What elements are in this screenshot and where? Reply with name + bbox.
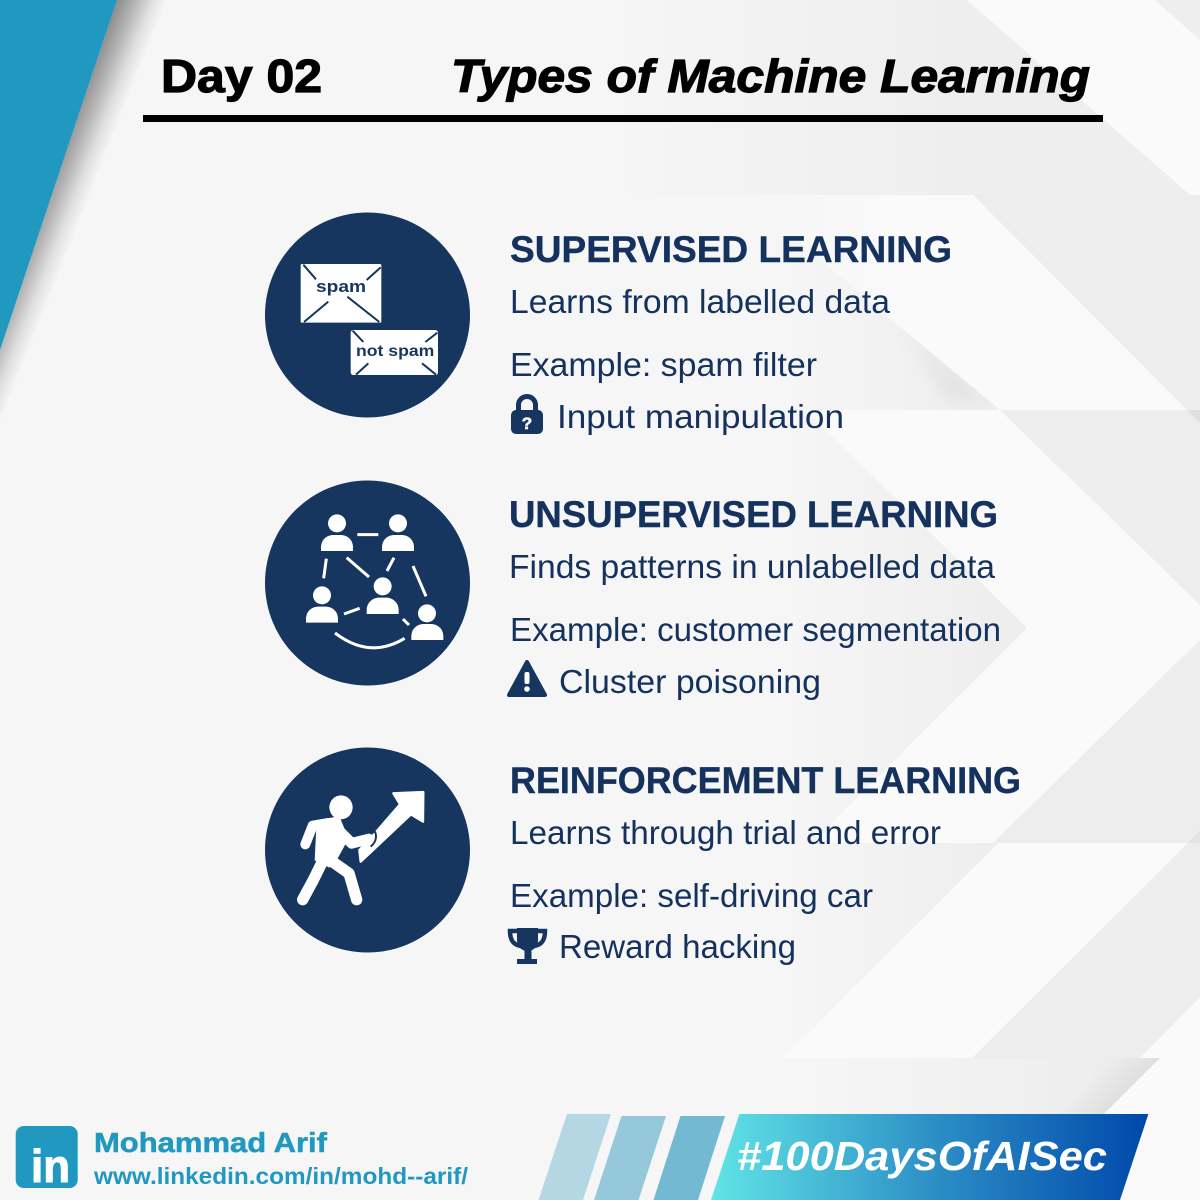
example: Example: self-driving car: [510, 877, 873, 914]
heading: reinforcement learning: REINFORCEMENT LEARNING: [510, 760, 1021, 801]
icon: connected people in circle: [265, 480, 470, 686]
example: Example: customer segmentation: [510, 611, 1001, 648]
panel: unsupervised learning: [265, 480, 1001, 700]
footer: LinkedIn logo: [16, 1126, 78, 1192]
icon: lock: [511, 396, 543, 434]
risk: cluster poisoning: Cluster poisoning: [559, 663, 821, 700]
icon: lock: ?: [522, 414, 532, 433]
icon: trophy: [510, 928, 545, 964]
heading: unsupervised learning: UNSUPERVISED LEARNING: [509, 494, 998, 535]
description: Learns through trial and error: [510, 814, 941, 851]
footer: hashtag banner: [711, 1114, 1148, 1200]
footer: decorative slanted bars: [538, 1114, 725, 1200]
footer: profile URL: www.linkedin.com/in/mohd--arif/: [93, 1163, 469, 1189]
icon: spam and not spam envelopes in circle: not spam: [356, 343, 434, 360]
icon: spam and not spam envelopes in circle: spam: [316, 277, 366, 296]
panel: reinforcement learning: [265, 748, 1021, 965]
description: Learns from labelled data: [510, 283, 891, 320]
example: Example: spam filter: [510, 346, 817, 383]
title underline: [143, 115, 1103, 122]
icon: warning triangle: [509, 662, 545, 695]
footer: LinkedIn logo: in: [31, 1140, 70, 1192]
icon: person pushing upward arrow in circle: [265, 748, 470, 952]
heading: supervised learning: SUPERVISED LEARNING: [510, 229, 952, 270]
description: Finds patterns in unlabelled data: [509, 548, 996, 585]
title: Types of Machine Learning: Types of Machine Learning: [451, 50, 1090, 102]
icon: spam and not spam envelopes in circle: [265, 212, 470, 418]
title: Day 02: Day 02: [161, 50, 322, 102]
risk: input manipulation: Input manipulation: [557, 398, 844, 435]
corner wedge: blue triangle with shadow: [0, 0, 167, 423]
footer: author name: Mohammad Arif: [94, 1127, 328, 1158]
risk: reward hacking: Reward hacking: [559, 928, 796, 965]
panel: supervised learning: [265, 212, 952, 435]
footer: hashtag banner: #100DaysOfAISec: [737, 1133, 1107, 1179]
